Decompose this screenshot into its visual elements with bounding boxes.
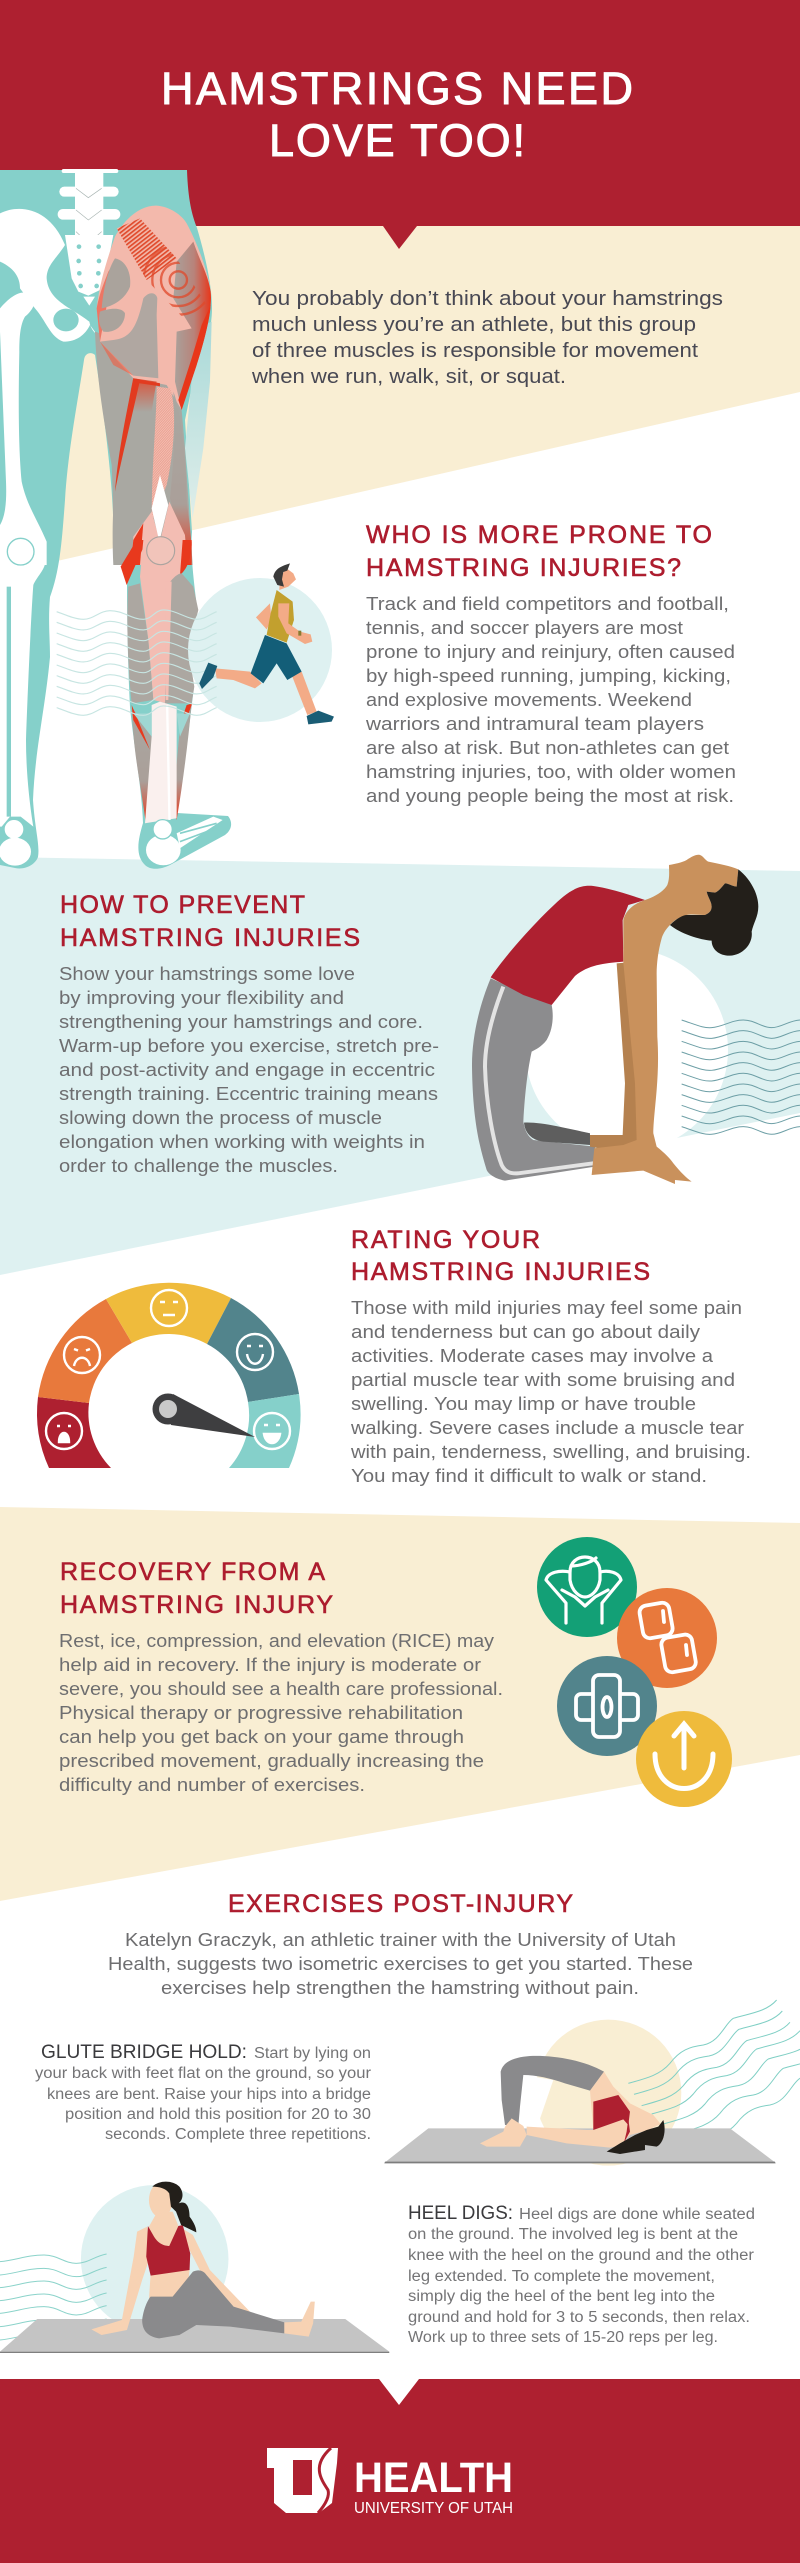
intro text [108,1930,693,1998]
heel digs text: leg extended. To complete the movement, [408,2268,715,2285]
face: very happy [254,1413,290,1449]
body text: Physical therapy or progressive rehabilitation [59,1703,463,1723]
title [161,63,633,166]
body text: strength training. Eccentric training means [59,1084,438,1104]
panel: recovery [59,1537,732,1807]
body text: Show your hamstrings some love [59,964,355,984]
heading: RATING YOUR [351,1226,540,1254]
yoga mat [384,2128,776,2163]
body text: Rest, ice, compression, and elevation (RICE) may [59,1631,494,1651]
wave lines [0,2254,107,2342]
body text [59,1631,503,1795]
logo: University of Utah Health [267,2448,513,2517]
heading: HAMSTRING INJURY [60,1591,333,1619]
body text: walking. Severe cases include a muscle tear [350,1418,744,1438]
panel: who is more prone [365,521,736,806]
heading: HAMSTRING INJURIES? [366,554,681,582]
glute bridge text: GLUTE BRIDGE HOLD: [41,2041,247,2063]
panel: rating injuries [37,1226,751,1486]
glute bridge text: position and hold this position for 20 to 30 [65,2106,371,2123]
gauge segments [37,1283,301,1468]
body text: prone to injury and reinjury, often caused [366,642,735,662]
face: happy [237,1334,273,1370]
body text [350,1298,751,1486]
body text: and young people being the most at risk. [366,786,734,806]
teal circle [81,2185,228,2333]
runner figure [199,563,334,724]
body text: strengthening your hamstrings and core. [59,1012,423,1032]
skeleton: pelvis and spine [0,169,120,565]
logo wordmark: UNIVERSITY OF UTAH [354,2500,513,2517]
body silhouette [0,170,231,869]
heading: HOW TO PREVENT [60,891,305,919]
hair [670,869,758,956]
heading: EXERCISES POST-INJURY [228,1890,573,1918]
illustration: runner [57,563,334,724]
intro text: exercises help strengthen the hamstring without pain. [161,1978,639,1998]
wave lines over leg [57,610,217,715]
body text: elongation when working with weights in [59,1132,425,1152]
body text: slowing down the process of muscle [59,1108,382,1128]
body text: and tenderness but can go about daily [351,1322,700,1342]
body text: swelling. You may limp or have trouble [351,1394,696,1414]
red top [491,886,645,1005]
yoga mat [0,2319,389,2353]
intro text: when we run, walk, sit, or squat. [251,366,566,388]
glute bridge text [35,2041,371,2143]
heading: WHO IS MORE PRONE TO [366,521,712,549]
heading [60,891,360,952]
body text [365,594,736,806]
back arm [590,963,638,1150]
gauge chart [37,1283,301,1468]
heading [351,1226,650,1286]
title: HAMSTRINGS NEED [161,63,633,114]
intro text: Health, suggests two isometric exercises to get you started. These [108,1954,693,1974]
body text: Track and field competitors and football, [366,594,729,614]
body text: with pain, tenderness, swelling, and bruising. [350,1442,751,1462]
icon: elevation [636,1711,732,1807]
intro text: You probably don’t think about your hamstrings [252,288,723,310]
heel digs text: simply dig the heel of the bent leg into the [408,2288,715,2305]
footer banner [0,2379,800,2563]
intro text: of three muscles is responsible for movement [252,340,698,362]
body text: by improving your flexibility and [59,988,344,1008]
trousers [472,978,595,1181]
logo mark: block U with DNA [267,2448,338,2513]
intro text: much unless you’re an athlete, but this group [252,314,696,336]
heading: HAMSTRING INJURIES [351,1258,650,1286]
gauge needle [152,1394,255,1437]
heel digs text: ground and hold for 3 to 5 seconds, then relax. [408,2309,750,2326]
body text: are also at risk. But non-athletes can get [366,738,729,758]
torso arm and head [592,855,738,1184]
figure [480,2056,665,2154]
intro text: Katelyn Graczyk, an athletic trainer with the University of Utah [125,1930,676,1950]
muscles: upper thigh and glute [95,206,213,565]
body text: prescribed movement, gradually increasing the [59,1751,484,1771]
body text: can help you get back on your game through [59,1727,464,1747]
heel digs text: knee with the heel on the ground and the other [408,2247,754,2264]
heading: RECOVERY FROM A [60,1558,325,1586]
heading: HAMSTRING INJURIES [60,924,360,952]
icon: compression bandage [557,1656,657,1756]
face: sad [64,1337,100,1373]
glute bridge text: your back with feet flat on the ground, so your [35,2065,371,2082]
body text: warriors and intramural team players [365,714,704,734]
body text: Those with mild injuries may feel some pain [351,1298,742,1318]
wave lines [628,2000,800,2143]
glute bridge text: seconds. Complete three repetitions. [105,2126,371,2143]
face: severe [46,1413,82,1449]
body text: and explosive movements. Weekend [366,690,692,710]
wave lines [682,1020,800,1134]
heading [366,521,712,582]
icon: ice [617,1588,717,1688]
body text: hamstring injuries, too, with older women [366,762,736,782]
panel: how to prevent [59,855,800,1184]
body text: difficulty and number of exercises. [59,1775,365,1795]
body text: Warm-up before you exercise, stretch pre- [59,1036,439,1056]
body text: You may find it difficult to walk or stand. [351,1466,707,1486]
heel digs text: HEEL DIGS: [408,2202,513,2224]
title: LOVE TOO! [269,115,525,166]
body text: order to challenge the muscles. [59,1156,338,1176]
body text: partial muscle tear with some bruising and [351,1370,735,1390]
face: neutral [151,1290,187,1326]
icon: rest [537,1537,637,1637]
header banner [0,0,800,249]
heel digs text: Work up to three sets of 15-20 reps per leg. [408,2329,718,2346]
body text: activities. Moderate cases may involve a [351,1346,714,1366]
heel digs text: on the ground. The involved leg is bent at the [408,2226,738,2243]
body text: by high-speed running, jumping, kicking, [366,666,731,686]
body text: tennis, and soccer players are most [366,618,683,638]
runner circle [188,578,332,722]
illustration: leg anatomy [0,169,231,869]
white gap under bridge [518,2075,553,2128]
cream circle [535,2020,681,2166]
heel digs text [408,2202,755,2346]
body text: severe, you should see a health care professional. [59,1679,503,1699]
left leg lower bones [0,538,45,866]
body text: and post-activity and engage in eccentric [59,1060,435,1080]
glute bridge text: Start by lying on [254,2045,371,2062]
figure [91,2182,315,2338]
right leg knee, calf and foot [113,537,223,865]
illustration: backbend pose [472,855,800,1184]
illustration: heel digs [0,2182,389,2353]
logo wordmark: HEALTH [354,2454,513,2502]
heading [60,1558,333,1619]
body text [59,964,439,1176]
glute bridge text: knees are bent. Raise your hips into a bridge [47,2086,371,2103]
body text: help aid in recovery. If the injury is moderate or [59,1655,481,1675]
white backdrop circle [525,949,728,1151]
illustration: glute bridge [384,2000,800,2166]
heel digs text: Heel digs are done while seated [519,2206,755,2223]
intro text [251,288,723,388]
panel: exercises post-injury [0,1890,800,2353]
